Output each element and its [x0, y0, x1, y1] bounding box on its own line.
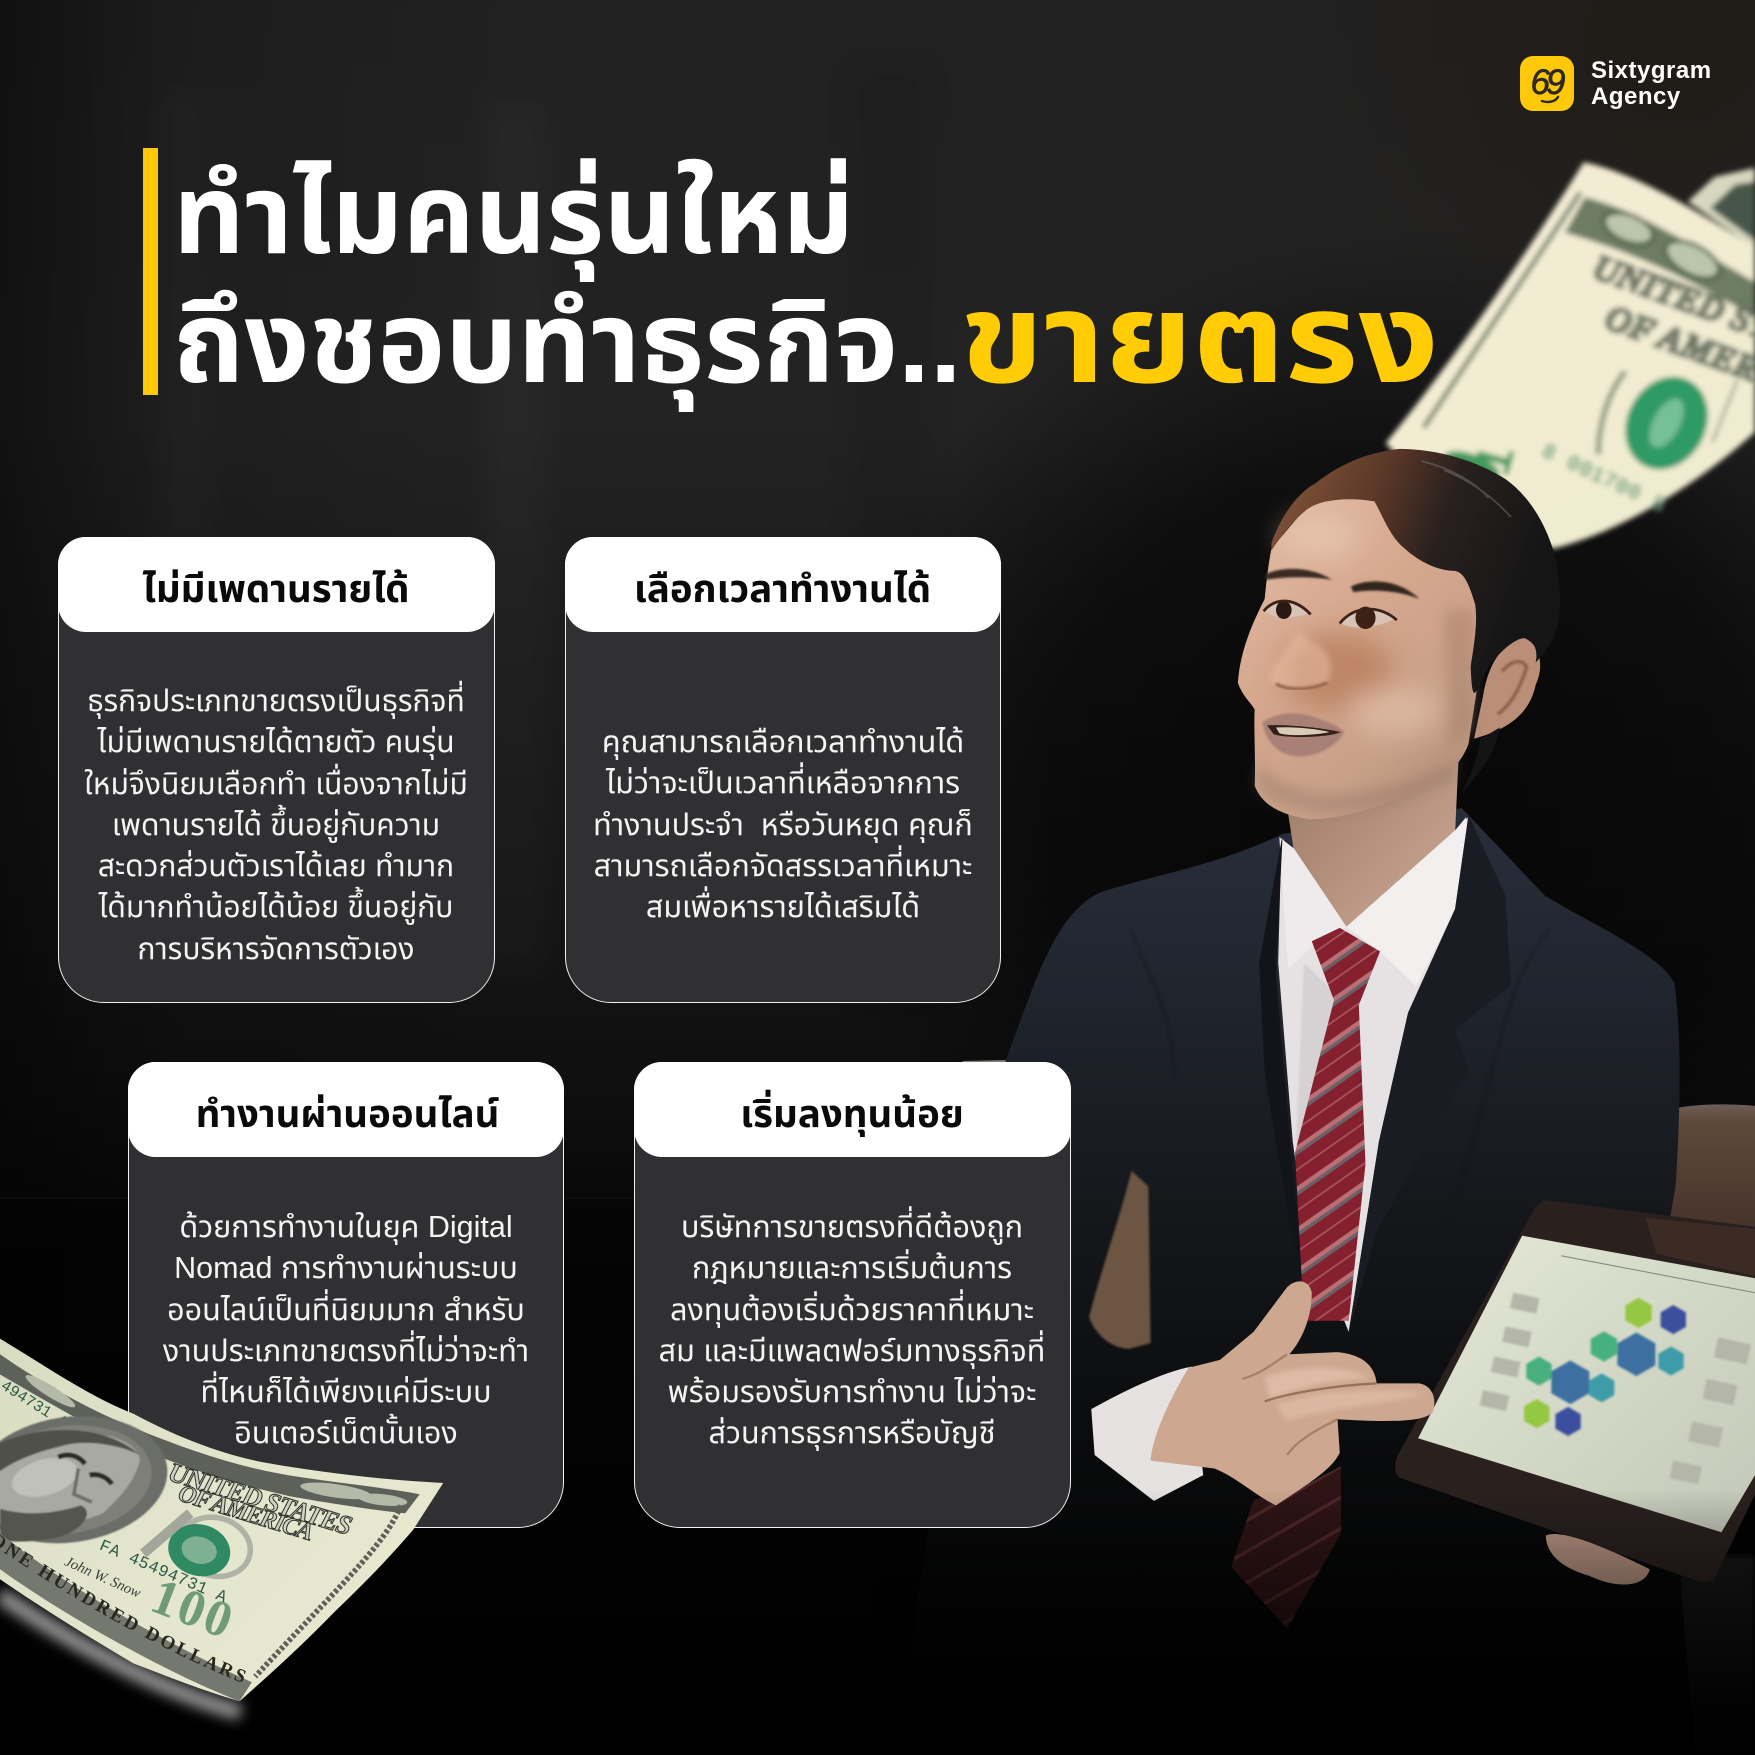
body text: [659, 1206, 1045, 1451]
face: [1238, 492, 1480, 819]
body text: ไม่ว่าจะเป็นเวลาที่เหลือจากการ: [606, 766, 960, 800]
photo: hundred dollar bill bottom left: 100: [143, 1567, 242, 1651]
body text: การบริหารจัดการตัวเอง: [138, 933, 414, 966]
title accent bar: [143, 148, 158, 395]
heading: ไม่มีเพดานรายได้: [143, 568, 409, 610]
body text: พร้อมรองรับการทำงาน ไม่ว่าจะ: [668, 1375, 1036, 1409]
body text: กฎหมายและการเริ่มต้นการ: [692, 1251, 1012, 1285]
seal and ghost 100: [182, 1514, 254, 1580]
shirt cuff: [1091, 1367, 1203, 1501]
tie: [1231, 928, 1380, 1629]
shirt: [1278, 817, 1468, 1332]
heading: [58, 536, 494, 632]
bottom fade to black: [873, 1489, 1755, 1755]
panel: low starting investment: [634, 1062, 1071, 1528]
title line 1: ทำไมคนรุ่นใหม่: [173, 153, 854, 277]
body text: ไม่มีเพดานรายได้ตายตัว คนรุ่น: [97, 726, 455, 759]
logo wordmark: [1591, 57, 1712, 110]
hair: [1271, 449, 1560, 693]
glow under bill: [0, 1595, 241, 1712]
body text: คุณสามารถเลือกเวลาทำงานได้: [602, 725, 964, 759]
body text: ออนไลน์เป็นที่นิยมมาก สำหรับ: [167, 1293, 525, 1327]
body text: ที่ไหนก็ได้เพียงแค่มีระบบ: [200, 1375, 492, 1409]
logo wordmark: Agency: [1591, 82, 1681, 110]
heading: [128, 1062, 564, 1156]
ear: [1474, 638, 1540, 739]
logo icon: [1520, 56, 1574, 111]
title line 2: ถึงชอบทำธุรกิจ..: [173, 280, 962, 407]
heading: เริ่มลงทุนน้อย: [740, 1092, 964, 1136]
top band: [0, 1354, 420, 1513]
body text: เพดานรายได้ ขึ้นอยู่กับความ: [112, 809, 440, 842]
sofa: [963, 1059, 1755, 1755]
body text: ลงทุนต้องเริ่มด้วยราคาที่เหมาะ: [670, 1293, 1034, 1327]
lapels: [1259, 834, 1304, 1310]
body text: [593, 725, 973, 924]
panel: no income ceiling: [58, 537, 495, 1003]
logo icon: 69: [1531, 63, 1565, 102]
body text: Nomad การทำงานผ่านระบบ: [174, 1251, 518, 1285]
panel: choose working hours: [565, 537, 1001, 1003]
heading: [634, 1062, 1070, 1156]
body text: [84, 680, 468, 966]
photo: hundred dollar bill bottom left: John W. Snow: [62, 1554, 143, 1602]
jacket: [895, 808, 1696, 1755]
body text: ธุรกิจประเภทขายตรงเป็นธุรกิจที่: [87, 685, 465, 718]
title line 2: ขายตรง: [960, 268, 1438, 409]
mouth: [1263, 713, 1344, 757]
body text: สม และมีแพลตฟอร์มทางธุรกิจที่: [659, 1334, 1045, 1368]
photo: blurred banknote top right: 8 001700 8: [1537, 438, 1670, 519]
logo wordmark: Sixtygram: [1591, 57, 1712, 84]
body text: ส่วนการธุรการหรือบัญชี: [708, 1416, 995, 1450]
body text: บริษัทการขายตรงที่ดีต้องถูก: [681, 1210, 1023, 1244]
body text: สะดวกส่วนตัวเราได้เลย ทำมาก: [98, 850, 454, 883]
body text: ใหม่จึงนิยมเลือกทำ เนื่องจากไม่มี: [84, 768, 468, 801]
nose: [1269, 632, 1331, 688]
heading: [564, 536, 1000, 632]
panel: work online: [128, 1062, 564, 1528]
bill lettering: UNITED STATES: [165, 1457, 356, 1541]
photo: blurred banknote top right: 01: [1454, 438, 1525, 509]
heading: ทำงานผ่านออนไลน์: [196, 1092, 499, 1136]
title line 2: [173, 268, 1438, 412]
portrait oval: [0, 1416, 168, 1544]
hand: [1151, 1281, 1434, 1505]
body text: ทำงานประจำ หรือวันหยุด คุณก็: [593, 808, 973, 842]
photo: hundred dollar bill bottom left: OF AMERICA: [175, 1480, 317, 1546]
heading: เลือกเวลาทำงานได้: [634, 568, 931, 610]
photo: hundred dollar bill bottom left: [0, 1338, 444, 1728]
bottom band: [0, 1533, 252, 1701]
body text: ด้วยการทำงานในยุค Digital: [179, 1210, 513, 1244]
body text: [162, 1210, 529, 1450]
body text: งานประเภทขายตรงที่ไม่ว่าจะทำ: [163, 1334, 529, 1368]
jacket seams: [1130, 929, 1550, 1231]
body text: ได้มากทำน้อยได้น้อย ขึ้นอยู่กับ: [99, 891, 453, 924]
body text: สามารถเลือกจัดสรรเวลาที่เหมาะ: [594, 849, 972, 883]
tablet: [1395, 1200, 1755, 1585]
cheek warm shade: [1282, 634, 1393, 710]
sofa sliver behind arm: [1089, 1171, 1151, 1349]
hair and head: [1238, 449, 1560, 819]
fingers under tablet: [1546, 1534, 1650, 1585]
neck: [1286, 761, 1458, 929]
right dotted band: [255, 1505, 401, 1677]
body text: สมเพื่อหารายได้เสริมได้: [646, 890, 920, 924]
logo: Sixtygram Agency: [1520, 56, 1712, 111]
eyebrows: [1266, 569, 1332, 580]
body text: อินเตอร์เน็ตนั้นเอง: [234, 1416, 458, 1450]
eyes: [1265, 603, 1308, 618]
photo: hundred dollar bill bottom left: FA 45494731 A: [96, 1537, 230, 1608]
